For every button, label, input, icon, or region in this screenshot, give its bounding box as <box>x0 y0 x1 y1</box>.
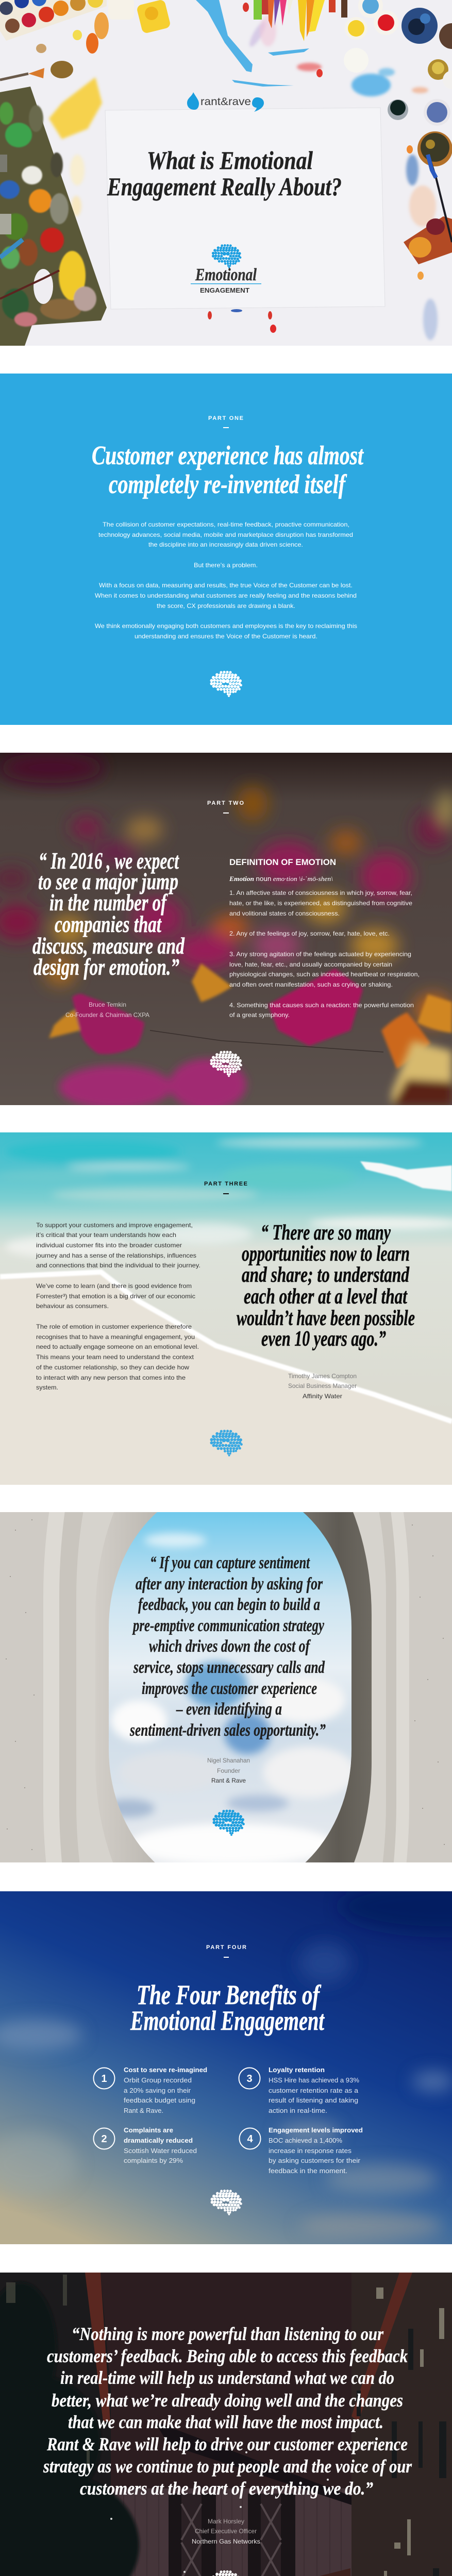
benefit 4: by asking customers for their <box>269 2157 361 2164</box>
definition items: 1. An affective state of consciousness in which joy, sorrow, fear, <box>229 889 412 896</box>
evening sky background <box>0 1880 452 2244</box>
benefit 4: BOC achieved a 1,400% <box>269 2137 342 2144</box>
benefit 3: customer retention rate as a <box>269 2087 359 2094</box>
quote attribution: Bruce Temkin <box>89 1001 126 1008</box>
heading: completely re-invented itself <box>109 470 347 499</box>
heading: Emotional Engagement <box>130 2005 325 2036</box>
body text: to interact with any new person that comes into the <box>36 1374 186 1381</box>
icon: brain <box>212 1809 245 1836</box>
body text: the score, CX professionals are drawing a blank. <box>157 602 295 609</box>
quote attribution: Nigel Shanahan <box>207 1757 250 1764</box>
definition items: and often overt manifestation, such as crying or shaking. <box>229 981 393 988</box>
benefit 3: HSS Hire has achieved a 93% <box>269 2076 359 2084</box>
pencils <box>254 0 347 41</box>
body text: system. <box>36 1384 58 1391</box>
definition items: 2. Any of the feelings of joy, sorrow, fear, hate, love, etc. <box>229 930 390 937</box>
icon: brain <box>212 244 241 268</box>
quote attribution <box>65 1001 149 1019</box>
watercolour tray <box>0 0 107 41</box>
logo small word: ENGAGEMENT <box>200 286 249 294</box>
quote: service, stops unnecessary calls and <box>133 1658 325 1677</box>
quote <box>237 1221 415 1351</box>
quote: design for emotion.” <box>34 954 179 980</box>
quote attribution: Northern Gas Networks <box>192 2538 260 2545</box>
panel: city quote <box>0 2273 452 2576</box>
window frame rings <box>43 1340 409 2061</box>
pronunciation line: Emotion noun emo·tion \i-ˈmō-shen\ <box>229 875 333 883</box>
quote: companies that <box>55 911 162 937</box>
definition items: physiological changes, such as increased heartbeat or respiration, <box>229 971 420 978</box>
title <box>107 146 342 201</box>
brush and small canvas at right <box>404 155 452 264</box>
quote: customers at the heart of everything we do.” <box>80 2478 373 2499</box>
definition items: 4. Something that causes such a reaction: the powerful emotion <box>229 1002 414 1009</box>
body text: With a focus on data, measuring and results, the true Voice of the Customer can be lost. <box>99 582 353 589</box>
definition items: 3. Any strong agitation of the feelings actuated by experiencing <box>229 951 411 958</box>
quote: “Nothing is more powerful than listening to our <box>72 2324 384 2344</box>
title: What is Emotional <box>147 146 313 175</box>
heading <box>92 441 364 499</box>
body text: journey and has a sense of the relationships, influences <box>36 1252 196 1259</box>
quote: in the number of <box>49 889 168 916</box>
quote: feedback, you can begin to build a <box>138 1595 320 1614</box>
panel: airplane window quote <box>0 1340 452 2061</box>
quote <box>129 1553 326 1740</box>
quote: to see a major jump <box>38 868 178 894</box>
quote attribution <box>192 2518 260 2545</box>
benefit 4: Engagement levels improved <box>269 2126 363 2134</box>
definition heading: DEFINITION OF EMOTION <box>229 857 336 867</box>
body text: the discipline into an increasingly data driven science. <box>148 541 303 548</box>
quote: “ There are so many <box>261 1221 391 1245</box>
benefit 2: 2 <box>101 2133 107 2145</box>
logo script word: Emotional <box>195 265 257 284</box>
quote: pre-emptive communication strategy <box>132 1616 325 1635</box>
quote: which drives down the cost of <box>149 1637 311 1656</box>
heading <box>130 1979 325 2036</box>
benefit 1: feedback budget using <box>124 2096 195 2104</box>
blue background <box>0 374 452 725</box>
window sky and clouds <box>103 1483 356 1893</box>
quote: better, what we’re already doing well and the changes <box>52 2390 403 2411</box>
quote attribution: Social Business Manager <box>288 1382 357 1389</box>
quote attribution: Founder <box>217 1767 240 1774</box>
section label: PART ONE <box>208 415 244 421</box>
quote attribution: Mark Horsley <box>208 2518 244 2525</box>
body text: The collision of customer expectations, real-time feedback, proactive communication, <box>103 521 349 528</box>
body text: technology advances, social media, mobile and marketplace disruption has transformed <box>98 531 353 538</box>
body text: To support your customers and improve engagement, <box>36 1222 193 1229</box>
painted desk background <box>0 0 452 346</box>
section label: PART FOUR <box>206 1944 247 1951</box>
body text <box>95 521 357 640</box>
body text: understanding and ensures the Voice of the Customer is heard. <box>135 633 317 640</box>
quote attribution: Chief Executive Officer <box>195 2528 257 2535</box>
benefit 2 <box>94 2126 197 2164</box>
body text: recognises that to have a meaningful engagement, you <box>36 1333 195 1341</box>
benefit 2: dramatically reduced <box>124 2137 193 2144</box>
body text: We think emotionally engaging both customers and employees is the key to reclaiming this <box>95 622 357 630</box>
icon: brain <box>210 1430 243 1456</box>
benefit 4 <box>239 2126 363 2175</box>
panel: part two <box>0 752 452 1110</box>
benefit 2: Scottish Water reduced <box>124 2147 197 2155</box>
benefit 3 <box>239 2066 359 2114</box>
panel: hero <box>0 0 452 346</box>
benefit 4: 4 <box>247 2133 253 2145</box>
wordmark: rant&rave <box>200 96 251 108</box>
benefit 1: Cost to serve re-imagined <box>124 2066 207 2074</box>
quote: “ If you can capture sentiment <box>150 1553 310 1572</box>
definition items: and volitional states of consciousness. <box>229 910 340 917</box>
quote attribution <box>288 1372 357 1400</box>
benefit 3: action in real-time. <box>269 2107 327 2114</box>
body text: individual customer fits into the broader customer <box>36 1242 182 1249</box>
wall speckles <box>6 1519 445 1850</box>
quote attribution: Affinity Water <box>303 1393 342 1400</box>
icon: brain <box>210 2570 242 2576</box>
section label: PART TWO <box>207 800 245 806</box>
benefit 1 <box>94 2066 207 2114</box>
body text: behaviour as consumers. <box>36 1302 109 1310</box>
benefit 3: Loyalty retention <box>269 2066 325 2074</box>
body text: But there’s a problem. <box>194 562 258 569</box>
body text: When it comes to understanding what customers are really feeling and the reasons behind <box>95 592 357 599</box>
quote attribution: Timothy James Compton <box>288 1372 357 1380</box>
quote: discuss, measure and <box>32 933 185 959</box>
benefit 1: 1 <box>101 2073 107 2084</box>
benefit 1: Rant & Rave. <box>124 2107 163 2114</box>
quote: after any interaction by asking for <box>136 1574 323 1594</box>
title: Engagement Really About? <box>107 172 342 201</box>
body text: The role of emotion in customer experience therefore <box>36 1323 192 1330</box>
panel: part one <box>0 374 452 725</box>
body text: Forrester³) that emotion is a big driver of our economic <box>36 1293 195 1300</box>
quote attribution: Rant & Rave <box>211 1777 246 1784</box>
panel: part four <box>0 1880 452 2244</box>
paint jars <box>108 0 452 166</box>
section label: PART THREE <box>204 1181 248 1187</box>
definition items <box>229 889 420 1019</box>
quote: sentiment-driven sales opportunity.” <box>129 1721 326 1740</box>
quote: improves the customer experience <box>142 1679 317 1698</box>
quote: – even identifying a <box>176 1700 282 1719</box>
manhattan bridge night background <box>0 2273 452 2576</box>
body text: it’s critical that your team understands how each <box>36 1231 176 1239</box>
benefit 2: complaints by 29% <box>124 2157 183 2164</box>
icon: brain <box>210 1051 242 1077</box>
benefit 1: a 20% saving on their <box>124 2087 191 2094</box>
paint splashes <box>36 0 438 340</box>
quote attribution: Co-Founder & Chairman CXPA <box>65 1011 149 1019</box>
body text <box>36 1222 200 1391</box>
body text: of the customer relationship, so they can decide how <box>36 1364 189 1371</box>
benefit 4: increase in response rates <box>269 2147 352 2155</box>
emotional engagement logo <box>191 244 261 294</box>
sheet of paper <box>105 108 385 309</box>
definition items: hate, or the like, is experienced, as distinguished from cognitive <box>229 900 412 907</box>
quote <box>32 848 185 980</box>
definition of emotion <box>229 857 420 1019</box>
quote: even 10 years ago.” <box>261 1327 386 1351</box>
quote attribution <box>207 1757 250 1784</box>
quote <box>43 2324 412 2499</box>
heading: The Four Benefits of <box>137 1979 322 2010</box>
artist palette <box>0 68 107 346</box>
body text: need to actually engage someone on an emotional level. <box>36 1343 199 1350</box>
beach background <box>0 1132 452 1485</box>
icon: brain <box>210 671 242 697</box>
icon: rave face drop <box>252 97 264 112</box>
rose petals on wood background <box>0 752 452 1110</box>
cabin wall <box>0 1512 452 1862</box>
definition items: of a great symphony. <box>229 1011 290 1019</box>
quote: in real-time will help us understand what we can do <box>60 2367 394 2388</box>
quote: that we can make that will have the most impact. <box>68 2412 383 2432</box>
definition items: love, hate, fear, etc., and usually accompanied by certain <box>229 961 392 968</box>
heading: Customer experience has almost <box>92 441 364 470</box>
panel: part three <box>0 1132 452 1485</box>
benefit 1: Orbit Group recorded <box>124 2076 192 2084</box>
icon: brain <box>211 2190 242 2215</box>
icon: rant face drop <box>187 92 199 110</box>
benefit 2: Complaints are <box>124 2126 173 2134</box>
benefit 3: result of listening and taking <box>269 2096 358 2104</box>
benefit 3: 3 <box>246 2073 253 2084</box>
rant and rave logo <box>187 92 264 112</box>
body text: This means your team need to understand the context <box>36 1353 194 1361</box>
quote: “ In 2016 , we expect <box>39 848 179 874</box>
body text: and connections that bind the individual to their journey. <box>36 1262 200 1269</box>
body text: We’ve come to learn (and there is good evidence from <box>36 1282 192 1290</box>
benefit 4: feedback in the moment. <box>269 2167 347 2175</box>
